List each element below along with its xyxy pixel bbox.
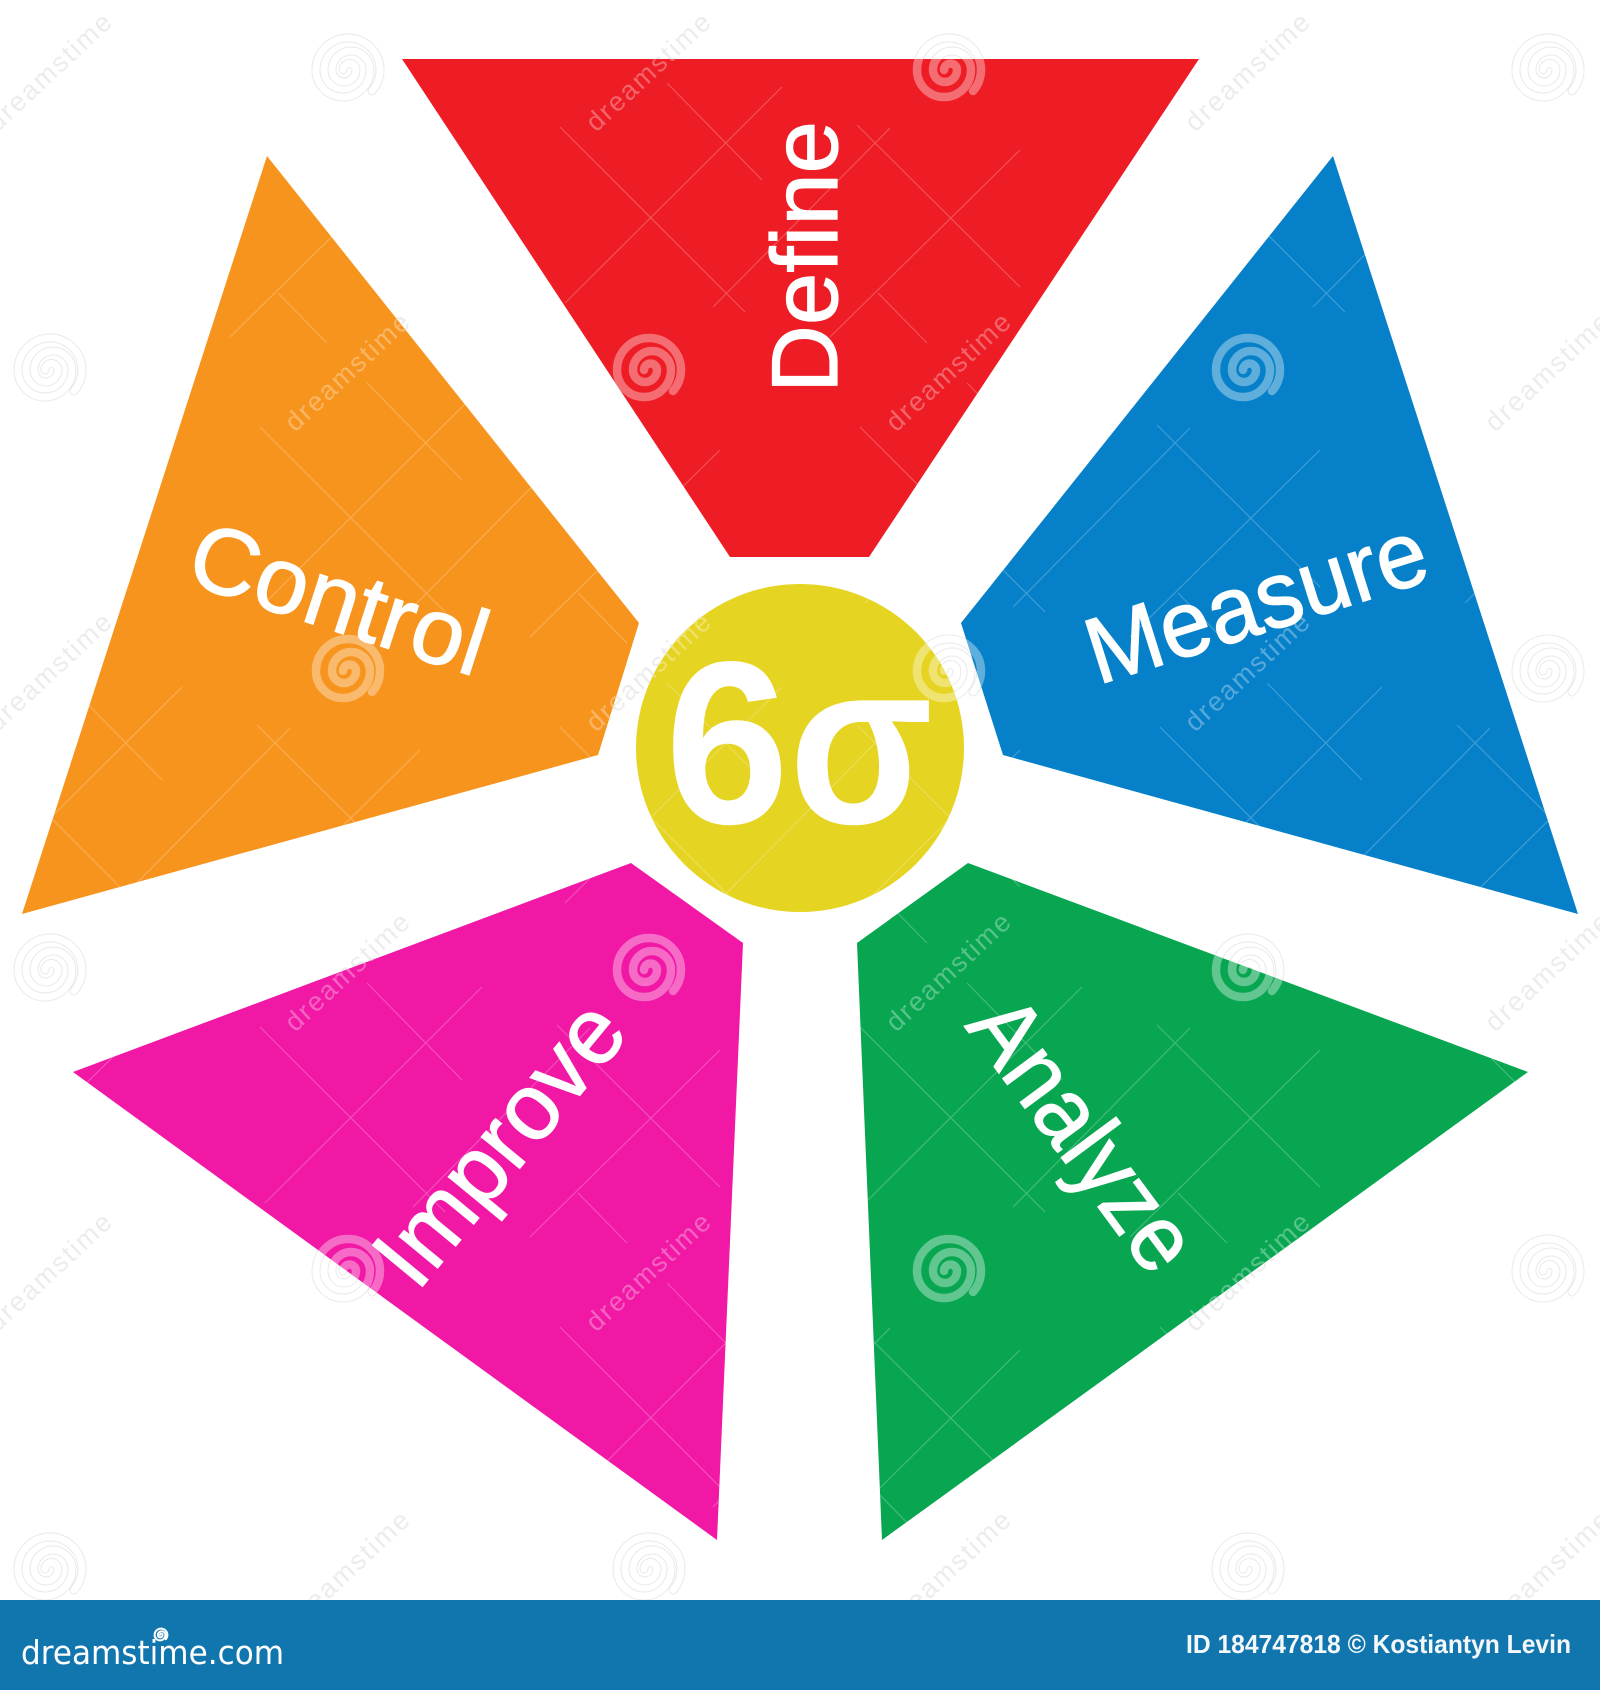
symbol: 6 sigma: 6 (665, 614, 789, 873)
icon: logo spiral (155, 1629, 167, 1640)
overlay watermark on coloured shapes: dreamstime (279, 306, 417, 437)
label: Improve: Improve (351, 980, 646, 1306)
background watermark: dreamstime text on white: dreamstime (580, 6, 718, 137)
overlay watermark on coloured shapes: dreamstime (580, 6, 718, 137)
panel: Measure (961, 156, 1578, 914)
background watermark: dreamstime text on white: dreamstime (880, 306, 1018, 437)
overlay watermark on coloured shapes: dreamstime (880, 306, 1018, 437)
overlay watermark on coloured shapes: dreamstime (880, 906, 1018, 1037)
center badge: six sigma (636, 584, 964, 912)
background watermark: dreamstime text on white: dreamstime (1179, 606, 1317, 737)
footer banner (0, 1600, 1600, 1690)
panel: Improve (73, 863, 743, 1540)
background watermark: dreamstime text on white: dreamstime (279, 306, 417, 437)
panel: Control (22, 156, 639, 914)
panel: Analyze (857, 863, 1528, 1540)
footer logo text: dreamstime.com (21, 1633, 284, 1672)
overlay watermark on coloured shapes: dreamstime (279, 906, 417, 1037)
label: Control: Control (177, 501, 501, 696)
background watermark: dreamstime text on white: dreamstime (279, 1504, 417, 1635)
label: Analyze: Analyze (948, 975, 1220, 1291)
overlay watermark on coloured shapes: dreamstime (580, 606, 718, 737)
symbol: 6 sigma: σ (789, 614, 933, 873)
background watermark: dreamstime text on white: dreamstime (1179, 1206, 1317, 1337)
background watermark: dreamstime text on white: dreamstime (880, 906, 1018, 1037)
background watermark: dreamstime text on white: dreamstime (279, 906, 417, 1037)
symbol: 6 sigma (665, 614, 933, 873)
background watermark: dreamstime text on white: dreamstime (880, 1504, 1018, 1635)
label: Define: Define (752, 121, 857, 393)
label: Measure: Measure (1072, 498, 1440, 704)
background watermark: dreamstime text on white: dreamstime (580, 606, 718, 737)
panel: Define (402, 59, 1199, 557)
background watermark: dreamstime text on white: dreamstime (1179, 6, 1317, 137)
overlay watermark on coloured shapes: dreamstime (1179, 606, 1317, 737)
overlay watermark on coloured shapes: dreamstime (1179, 1206, 1317, 1337)
footer credit text: ID 184747818 © Kostiantyn Levin (1186, 1629, 1571, 1659)
background watermark: dreamstime text on white: dreamstime (580, 1206, 718, 1337)
overlay watermark on coloured shapes: dreamstime (580, 1206, 718, 1337)
